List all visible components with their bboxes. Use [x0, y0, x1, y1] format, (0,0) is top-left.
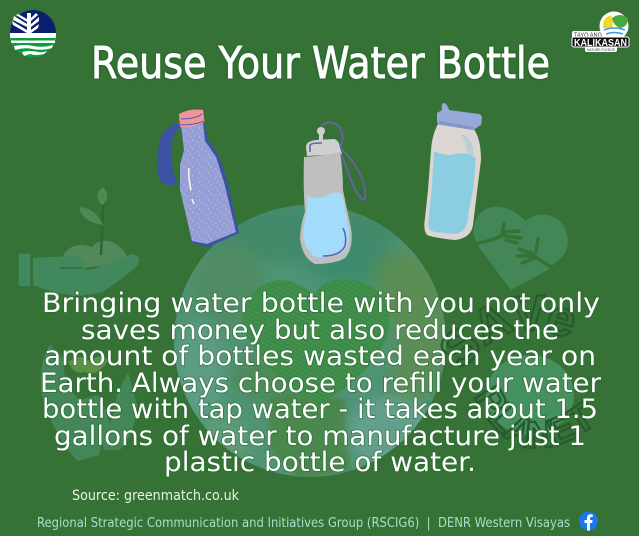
source line: Source: greenmatch.co.uk — [72, 488, 240, 504]
body text: amount of bottles wasted each year on — [44, 341, 596, 372]
icon: heart held by hands — [473, 207, 568, 290]
icon: save the planet lettering: SAVe — [440, 294, 574, 367]
logo: Tayo ang Kalikasan nature pledge: NATURE PLEDGE — [587, 47, 615, 52]
logo: Tayo ang Kalikasan nature pledge — [572, 12, 629, 52]
scribbled heart on globe — [242, 279, 389, 404]
icon: save the planet lettering: PLANET — [474, 384, 592, 450]
icon: blue speckled water bottle — [157, 110, 239, 247]
logo: Tayo ang Kalikasan nature pledge: TAYO ANG — [574, 33, 602, 39]
icon: clear water bottle with blue lid — [424, 103, 482, 240]
logo: DENR seal — [10, 10, 56, 57]
globe illustration — [174, 202, 450, 480]
body text: bottle with tap water - it takes about 1.5 — [42, 394, 598, 425]
icon: hand holding a seedling — [18, 187, 139, 296]
body text — [40, 288, 602, 478]
body text: saves money but also reduces the — [81, 315, 559, 346]
title: Reuse Your Water Bottle — [91, 38, 550, 89]
icon: recycling hands and sprout — [41, 345, 137, 461]
footer credit: Regional Strategic Communication and Initiatives Group (RSCIG6) | DENR Western Visayas — [37, 515, 570, 531]
icon: grey water bottle with strap — [300, 122, 365, 264]
body text: gallons of water to manufacture just 1 — [54, 421, 586, 452]
icon: save the planet lettering — [440, 294, 592, 450]
logo: Tayo ang Kalikasan nature pledge: KALIKASAN — [574, 38, 627, 49]
body text: Earth. Always choose to refill your water — [40, 368, 602, 399]
icon: facebook — [579, 512, 598, 530]
body text: plastic bottle of water. — [164, 447, 476, 478]
body text: Bringing water bottle with you not only — [42, 288, 600, 319]
